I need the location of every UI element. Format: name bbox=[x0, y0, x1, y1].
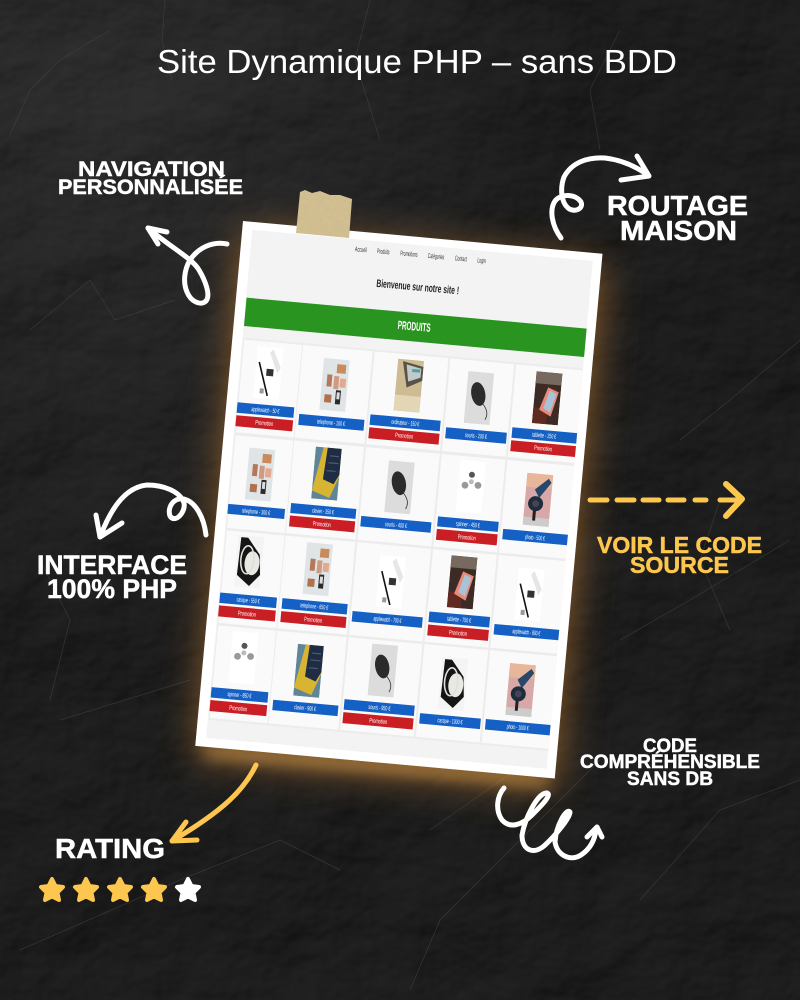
product: clavier 350 bbox=[286, 441, 364, 540]
website navigation menu: Login bbox=[477, 257, 486, 265]
website heading: Bienvenue sur notre site ! bbox=[376, 278, 460, 297]
label: code compréhensible sans db: COMPRÉHENSIBLE bbox=[580, 751, 760, 773]
arrow: routage bbox=[552, 156, 649, 238]
product: applewatch 700 bbox=[349, 542, 431, 642]
product: spinner 850: Promotion bbox=[229, 705, 248, 713]
product: ordinateur 150: Promotion bbox=[395, 432, 414, 441]
label: routage maison: ROUTAGE bbox=[607, 190, 748, 221]
product: spinner 850: spinner - 850 € bbox=[227, 691, 252, 700]
product: telephone 650 bbox=[277, 536, 355, 635]
green banner: produits bbox=[244, 298, 587, 357]
website navigation menu: Produits bbox=[377, 248, 390, 256]
website navigation menu: Catégories bbox=[427, 253, 445, 261]
product: photo 500: photo - 500 € bbox=[525, 534, 545, 543]
label: code compréhensible sans db: SANS DB bbox=[627, 769, 713, 790]
panel: website screenshot on white paper bbox=[195, 221, 603, 779]
label: navigation personnalisée bbox=[58, 157, 243, 199]
arrow: voir le code source (dashed) bbox=[590, 484, 742, 516]
product: tablette 250: tablette - 250 € bbox=[532, 432, 557, 441]
arrow: rating bbox=[172, 765, 256, 841]
product: telephone 100: telephone - 100 € bbox=[317, 419, 345, 428]
label: interface 100% php: 100% PHP bbox=[47, 574, 177, 604]
product: casque 550: Promotion bbox=[238, 610, 256, 619]
arrow: navigation bbox=[148, 228, 227, 303]
product: applewatch 50: applewatch - 50 € bbox=[251, 406, 280, 416]
product: telephone 100 bbox=[295, 345, 373, 444]
product: telephone 300: telephone - 300 € bbox=[242, 508, 271, 517]
label: voir le code source bbox=[597, 532, 762, 578]
rating stars bbox=[41, 879, 199, 900]
product: applewatch 50: Promotion bbox=[255, 419, 274, 428]
product: casque 1000: casque - 1000 € bbox=[437, 717, 463, 726]
product: telephone 650: Promotion bbox=[304, 616, 323, 625]
product: souris 400 bbox=[358, 447, 440, 546]
product: casque 550 bbox=[217, 530, 285, 628]
product: tablette 250: Promotion bbox=[534, 445, 553, 453]
website navigation menu bbox=[355, 246, 486, 265]
product: photo 1000: photo - 1000 € bbox=[506, 723, 529, 732]
product: tablette 750: Promotion bbox=[449, 629, 467, 638]
product: spinner 450 bbox=[433, 454, 505, 552]
product grid bbox=[209, 338, 583, 751]
label: navigation personnalisée: NAVIGATION bbox=[78, 157, 225, 181]
product: telephone 300 bbox=[226, 435, 293, 533]
product: clavier 900: clavier - 900 € bbox=[294, 704, 317, 713]
product: photo 500 bbox=[499, 460, 574, 559]
product: souris 950: Promotion bbox=[369, 718, 388, 726]
paper glow bbox=[197, 231, 603, 788]
product: telephone 650: telephone - 650 € bbox=[300, 602, 329, 612]
product: photo 1000 bbox=[482, 650, 557, 749]
title: Site Dynamique PHP – sans BDD bbox=[157, 43, 677, 80]
product: ordinateur 150 bbox=[366, 351, 448, 451]
product: tablette 750: tablette - 750 € bbox=[447, 616, 472, 625]
product: souris 400: souris - 400 € bbox=[385, 521, 408, 530]
product: souris 200 bbox=[442, 358, 514, 457]
product: clavier 350: clavier - 350 € bbox=[312, 507, 334, 516]
label: interface 100% php: INTERFACE bbox=[37, 550, 187, 580]
product: casque 1000 bbox=[416, 644, 488, 743]
label: code compréhensible sans db: CODE bbox=[643, 736, 697, 757]
masking tape bbox=[296, 190, 352, 238]
product: spinner 450: spinner - 450 € bbox=[456, 521, 480, 530]
product: applewatch 800 bbox=[490, 555, 566, 654]
product: ordinateur 150: ordinateur - 150 € bbox=[391, 419, 420, 428]
product: souris 200: souris - 200 € bbox=[465, 432, 487, 441]
product: casque 550: casque - 550 € bbox=[236, 596, 260, 606]
label: routage maison bbox=[607, 190, 748, 246]
product: tablette 250 bbox=[508, 364, 583, 463]
product: spinner 850 bbox=[209, 625, 276, 723]
product: tablette 750 bbox=[425, 549, 497, 647]
product: souris 950: souris - 950 € bbox=[368, 704, 391, 713]
label: navigation personnalisée: PERSONNALISÉE bbox=[58, 174, 243, 199]
website navigation menu: Accueil bbox=[355, 246, 367, 254]
label: interface 100% php bbox=[37, 550, 187, 604]
website navigation menu: Contact bbox=[455, 255, 467, 263]
product: applewatch 50 bbox=[235, 340, 302, 437]
label: rating: RATING bbox=[55, 833, 165, 864]
product: spinner 450: Promotion bbox=[457, 534, 476, 542]
product: clavier 350: Promotion bbox=[313, 521, 331, 529]
label: code compréhensible sans db bbox=[580, 736, 760, 790]
label: routage maison: MAISON bbox=[620, 215, 737, 246]
website navigation menu: Promotions bbox=[400, 250, 418, 259]
label: voir le code source: VOIR LE CODE bbox=[597, 532, 762, 558]
green banner: produits: PRODUITS bbox=[397, 318, 431, 335]
product: applewatch 700: applewatch - 700 € bbox=[373, 615, 402, 625]
product: applewatch 800: applewatch - 800 € bbox=[512, 628, 541, 638]
product: clavier 900 bbox=[269, 631, 347, 730]
product: souris 950 bbox=[340, 637, 422, 737]
arrow: interface bbox=[96, 485, 206, 537]
arrow: code compréhensible bbox=[498, 788, 602, 858]
label: voir le code source: SOURCE bbox=[630, 552, 729, 578]
